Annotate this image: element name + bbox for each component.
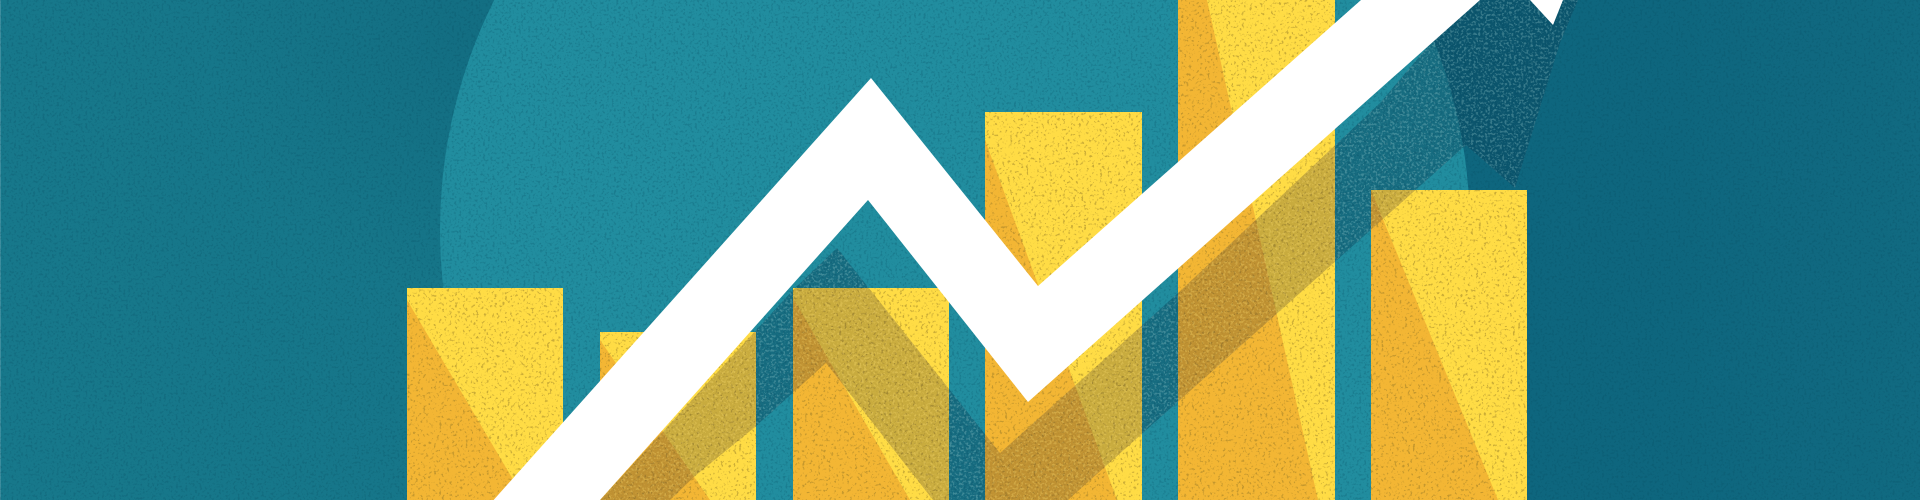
- arrow shaft: [494, 0, 1480, 500]
- white arrow: [494, 0, 1563, 500]
- bar grain: [407, 0, 1527, 500]
- bar 4: [985, 112, 1142, 500]
- bar 5: [1178, 0, 1335, 500]
- arrowhead barb: [1530, 0, 1563, 25]
- arrow shadow over background: [754, 0, 1578, 500]
- bar 1: [407, 288, 563, 500]
- bar 6: [1371, 190, 1527, 500]
- bar chart: [407, 0, 1527, 500]
- bar 2: [600, 332, 756, 500]
- bar 3: [793, 288, 949, 500]
- large teal circle: [440, 0, 1470, 500]
- arrow shadow over bars: [600, 146, 1416, 500]
